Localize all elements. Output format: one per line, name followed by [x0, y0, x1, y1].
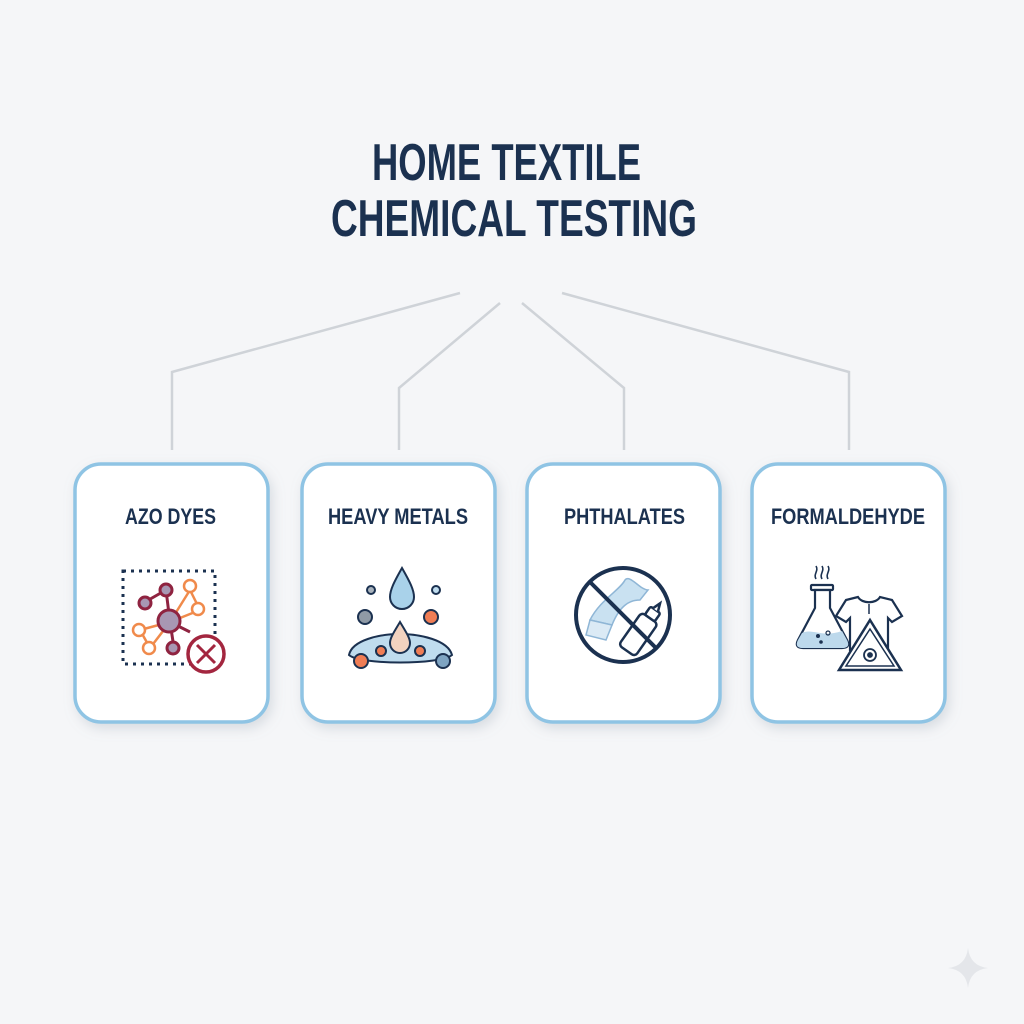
heading: phthalates: PHTHALATES: [564, 504, 685, 529]
icon: droplets and metals: [349, 568, 452, 668]
panel: phthalates: [527, 464, 720, 722]
icon: molecule: [123, 571, 224, 672]
title: CHEMICAL TESTING: [331, 190, 697, 248]
heading: heavy metals: HEAVY METALS: [328, 504, 468, 529]
icon: flask shirt hazard: [797, 566, 902, 670]
icon: no phthalates: [576, 568, 670, 662]
panel: formaldehyde: [752, 464, 945, 722]
panel: azo dyes: [75, 464, 268, 722]
title: HOME TEXTILE: [372, 134, 641, 192]
connector lines: [172, 293, 849, 450]
icon: sparkle: [948, 948, 988, 988]
heading: azo dyes: AZO DYES: [125, 504, 216, 529]
panel: heavy metals: [302, 464, 495, 722]
title: [331, 134, 697, 248]
heading: formaldehyde: FORMALDEHYDE: [771, 504, 925, 529]
